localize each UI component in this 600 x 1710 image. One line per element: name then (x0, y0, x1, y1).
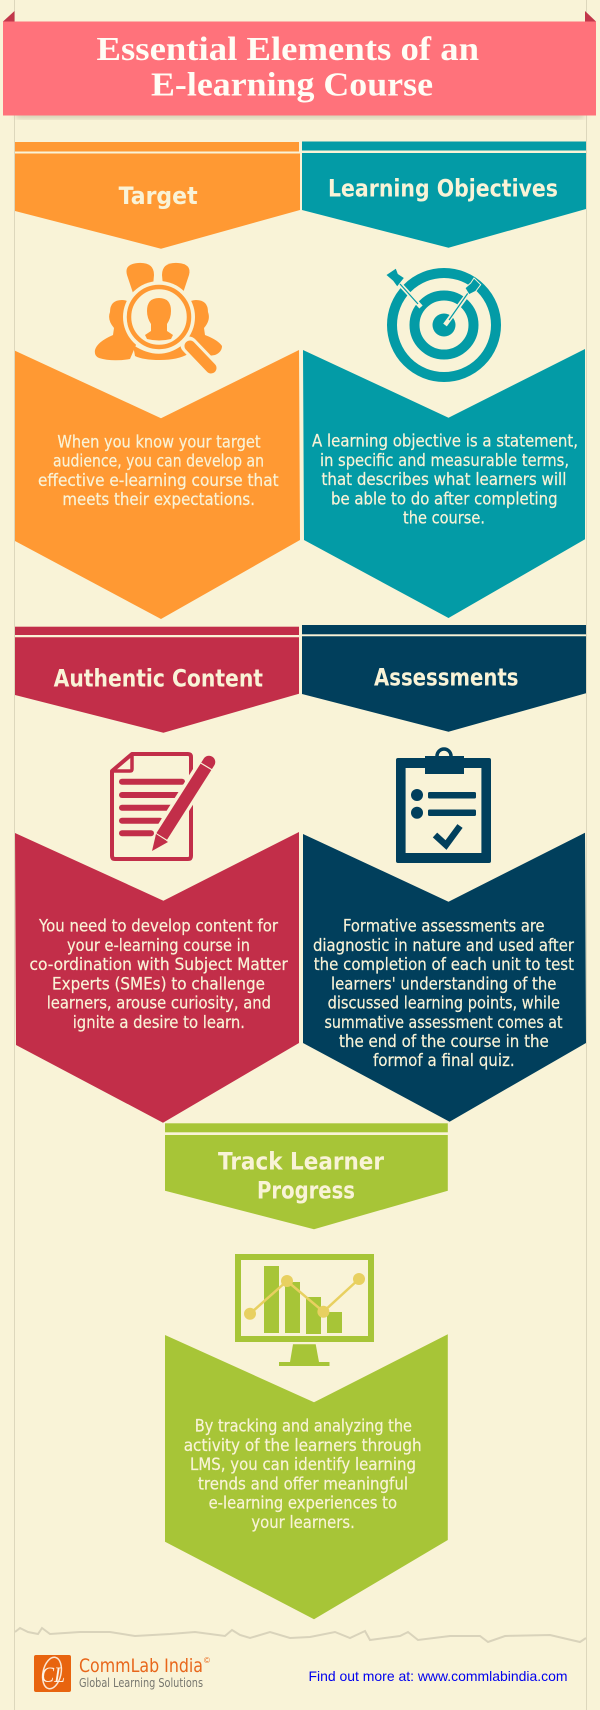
text: assessments description: formof a final quiz. (373, 1051, 515, 1070)
text: target description: audience, you can develop an (53, 452, 264, 471)
text: learning objectives description: be able to do after completing (331, 489, 558, 508)
text: assessments description: discussed learning points, while (328, 994, 560, 1012)
text: track learner progress description: activity of the learners through (184, 1436, 422, 1455)
icon: audience magnifier (95, 263, 222, 369)
heading: target: Target (119, 182, 198, 210)
title banner (3, 11, 596, 118)
heading: track learner progress: Track Learner (218, 1147, 384, 1175)
icon: clipboard checklist (396, 749, 491, 863)
logo mark: CL (41, 1662, 65, 1687)
text: learning objectives description (312, 432, 578, 528)
panel: assessments (302, 625, 586, 1122)
text: authentic content description: your e-learning course in (67, 936, 250, 955)
text: assessments description: the completion of each unit to test (314, 955, 574, 974)
title: E-learning Course (151, 67, 433, 104)
text: authentic content description: learners, arouse curiosity, and (47, 994, 271, 1012)
text: authentic content description (30, 917, 288, 1032)
text: track learner progress description: trends and offer meaningful (198, 1474, 408, 1493)
logo wordmark: CommLab India (79, 1655, 203, 1677)
text: target description (38, 433, 279, 509)
text: assessments description: Formative assessments are (343, 917, 545, 936)
text: assessments description (313, 917, 574, 1070)
panel: learning objectives (302, 142, 586, 618)
text: target description: meets their expectations. (62, 490, 255, 509)
logo mark (34, 1655, 71, 1692)
logo wordmark: Global Learning Solutions (79, 1676, 203, 1690)
text: learning objectives description: A learning objective is a statement, (312, 432, 578, 451)
text: target description: effective e-learning course that (38, 471, 279, 490)
text: learning objectives description: that describes what learners will (322, 470, 566, 489)
text: authentic content description: You need to develop content for (38, 917, 278, 936)
text: track learner progress description: your learners. (251, 1513, 355, 1532)
text: track learner progress description (184, 1417, 422, 1532)
text: assessments description: summative assessment comes at (324, 1013, 563, 1032)
text: track learner progress description: By tracking and analyzing the (195, 1417, 412, 1436)
footer link text: Find out more at: www.commlabindia.com (308, 1668, 568, 1684)
panel: target (15, 142, 300, 619)
logo wordmark: © (204, 1656, 210, 1665)
logo: CommLab India (34, 1655, 210, 1692)
text: target description: When you know your target (57, 433, 261, 452)
text: assessments description: the end of the course in the (339, 1032, 549, 1051)
title (96, 31, 479, 104)
panel: authentic content (15, 627, 299, 1123)
logo wordmark (79, 1655, 210, 1690)
text: track learner progress description: LMS, you can identify learning (190, 1455, 416, 1474)
icon: monitor with chart (238, 1257, 371, 1366)
icon: target board with arrows (386, 269, 496, 377)
heading: learning objectives: Learning Objectives (328, 175, 558, 203)
icon: document and pen (112, 754, 214, 859)
text: authentic content description: ignite a desire to learn. (73, 1013, 245, 1032)
heading: track learner progress: Progress (257, 1176, 355, 1204)
text: authentic content description: co-ordination with Subject Matter (30, 955, 288, 974)
text: assessments description: diagnostic in nature and used after (313, 936, 574, 955)
text: track learner progress description: e-learning experiences to (209, 1494, 397, 1512)
heading: assessments: Assessments (374, 664, 518, 692)
heading: authentic content: Authentic Content (54, 665, 263, 693)
title: Essential Elements of an (96, 31, 479, 68)
panel: track learner progress (165, 1123, 448, 1619)
text: authentic content description: Experts (SMEs) to challenge (52, 974, 265, 993)
text: learning objectives description: the course. (403, 509, 485, 528)
text: learning objectives description: in specific and measurable terms, (320, 451, 569, 470)
text: assessments description: learners' understanding of the (331, 974, 556, 993)
heading: track learner progress (218, 1147, 384, 1204)
